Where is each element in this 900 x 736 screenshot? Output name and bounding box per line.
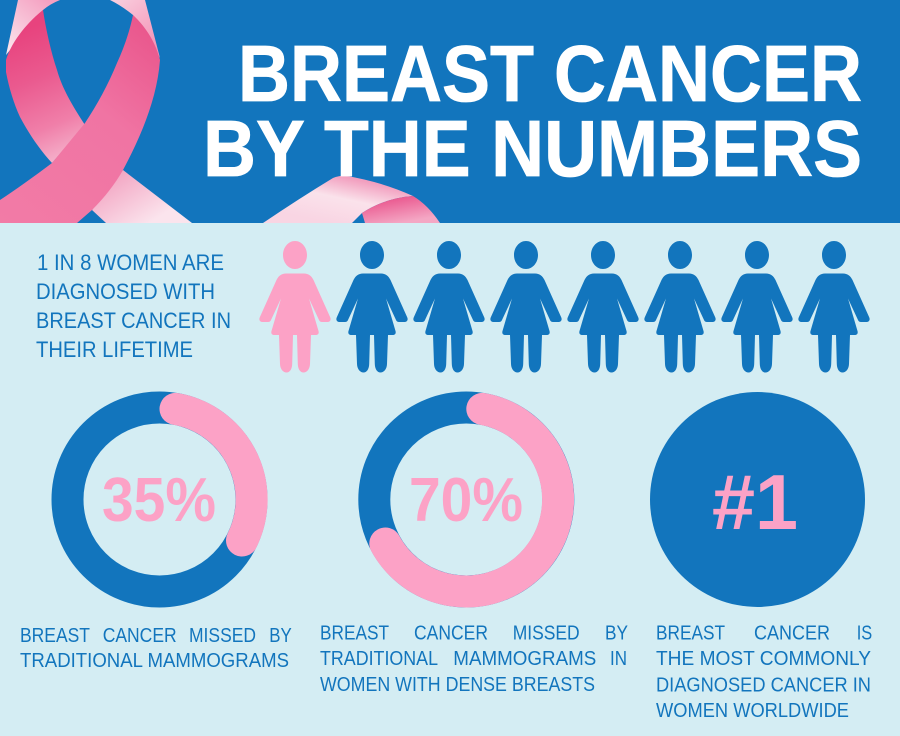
- caption: 70% missed: WOMEN WITH DENSE BREASTS: [320, 673, 595, 696]
- caption: 70% missed: IN: [610, 647, 627, 670]
- caption: 35% missed: BY: [269, 624, 292, 647]
- text: 1 in 8 statistic: 1 IN 8 WOMEN ARE: [37, 250, 224, 275]
- header band: [0, 0, 900, 223]
- caption: 70% missed: TRADITIONAL: [320, 647, 438, 670]
- caption: most commonly diagnosed: BREAST: [656, 622, 725, 644]
- pictogram: 1 of 8 women: [259, 241, 870, 372]
- caption: 70% missed: MISSED: [513, 622, 580, 644]
- icon: pink awareness ribbon: [0, 0, 440, 223]
- icon: blue woman 7: [721, 241, 793, 372]
- caption: 70% missed: MAMMOGRAMS: [453, 647, 596, 670]
- chart: number one circle: [650, 392, 865, 607]
- caption: 35% missed: [20, 624, 292, 672]
- icon: blue woman 2: [336, 241, 408, 372]
- caption: 35% missed: MISSED: [189, 624, 256, 647]
- caption: most commonly diagnosed: DIAGNOSED CANCER IN: [656, 674, 871, 696]
- icon: blue woman 4: [490, 241, 562, 372]
- caption: 70% missed: BREAST: [320, 622, 389, 644]
- chart: 35% donut: 35%: [102, 466, 216, 535]
- icon: blue woman 3: [413, 241, 485, 372]
- caption: most commonly diagnosed: IS: [857, 622, 872, 644]
- caption: 70% missed: CANCER: [414, 622, 488, 644]
- caption: most commonly diagnosed: CANCER: [754, 622, 830, 644]
- icon: blue woman 5: [567, 241, 639, 372]
- text: 1 in 8 statistic: BREAST CANCER IN: [36, 308, 231, 333]
- text: 1 in 8 statistic: [36, 250, 231, 362]
- chart: 70% donut: 70%: [409, 466, 523, 535]
- caption: 35% missed: TRADITIONAL MAMMOGRAMS: [20, 649, 289, 672]
- chart: 35% donut: [68, 408, 252, 592]
- text: 1 in 8 statistic: DIAGNOSED WITH: [36, 279, 215, 304]
- chart: number one circle: #1: [712, 458, 798, 546]
- chart: 70% donut: [374, 408, 558, 592]
- title: [203, 29, 862, 193]
- text: 1 in 8 statistic: THEIR LIFETIME: [36, 337, 193, 362]
- caption: most commonly diagnosed: THE MOST COMMONLY: [656, 647, 871, 670]
- caption: 70% missed: BY: [605, 622, 628, 644]
- caption: 35% missed: CANCER: [103, 624, 177, 647]
- caption: 35% missed: BREAST: [20, 624, 90, 647]
- caption: most commonly diagnosed: WOMEN WORLDWIDE: [656, 699, 849, 722]
- icon: blue woman 6: [644, 241, 716, 372]
- caption: 70% missed: [320, 622, 628, 696]
- icon: pink woman: [259, 241, 331, 372]
- caption: most commonly diagnosed: [656, 622, 872, 722]
- icon: blue woman 8: [798, 241, 870, 372]
